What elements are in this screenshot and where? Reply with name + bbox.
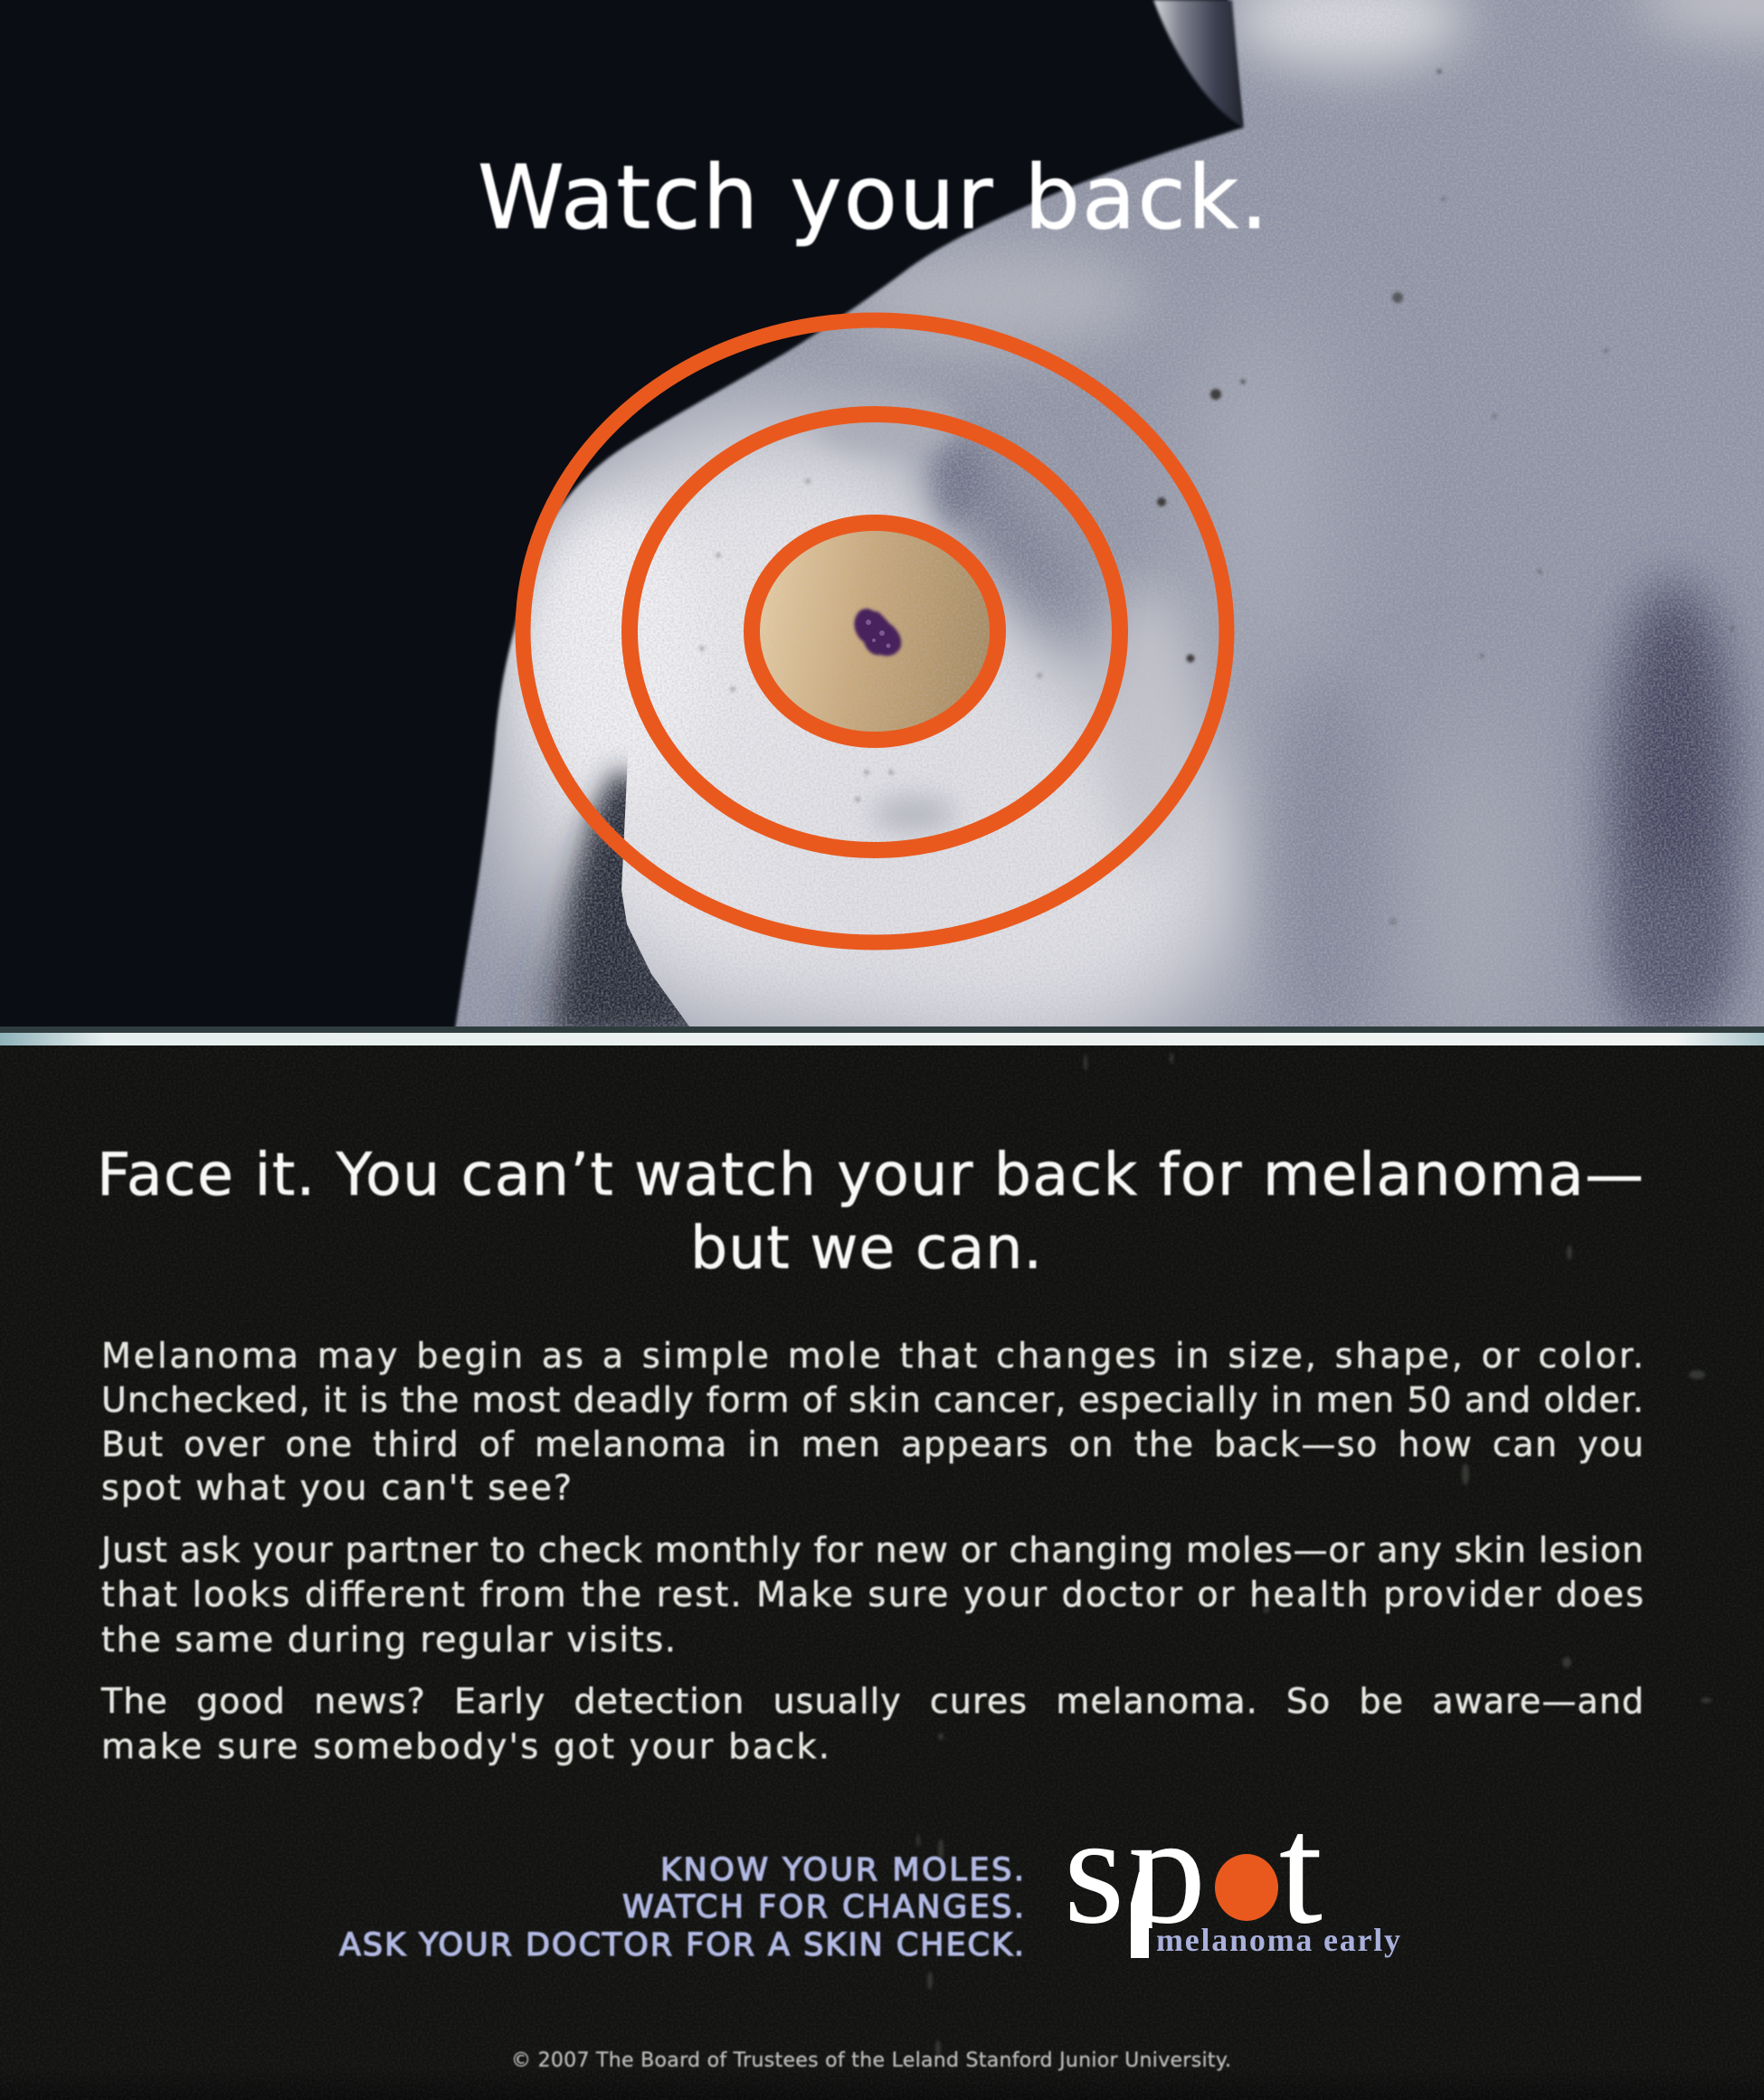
text block: paragraph one: Unchecked, it is the most deadly form of skin cancer, especially in men 50 and older.: [101, 1380, 1644, 1420]
logo wordmark: t: [1279, 1784, 1323, 1956]
text block: paragraph two: [100, 1530, 1644, 1660]
logo tagline: melanoma early: [1156, 1922, 1400, 1958]
heading: [97, 1141, 1644, 1282]
logo wordmark: p: [1128, 1784, 1206, 1956]
tagline: WATCH FOR CHANGES.: [622, 1889, 1024, 1925]
text block: paragraph two: Just ask your partner to check monthly for new or changing moles—or any skin lesion: [100, 1530, 1644, 1570]
tagline: [339, 1852, 1024, 1963]
heading: Face it. You can’t watch your back for melanoma—: [97, 1141, 1644, 1209]
icon: outer orange ring: [523, 320, 1227, 942]
title: Watch your back.: [478, 147, 1268, 249]
logo: p stem: [1131, 1872, 1149, 1958]
tagline: ASK YOUR DOCTOR FOR A SKIN CHECK.: [339, 1927, 1024, 1963]
panel: photo of bare back and shoulder: [453, 0, 1764, 1026]
icon: inner orange ring: [752, 523, 998, 740]
logo wordmark: o: [1217, 1784, 1295, 1956]
tagline: KNOW YOUR MOLES.: [660, 1852, 1024, 1888]
panel: black text panel: [0, 1045, 1764, 2100]
heading: but we can.: [690, 1215, 1042, 1282]
icon: melanoma mole: [854, 609, 901, 656]
logo: spot melanoma early: [1069, 1834, 1400, 1958]
text block: paragraph two: the same during regular visits.: [101, 1620, 676, 1660]
text block: paragraph three: make sure somebody's got your back.: [101, 1726, 830, 1766]
decoration: print scratches and specks: [916, 1053, 1712, 2057]
icon: middle orange ring: [630, 414, 1120, 850]
text block: paragraph one: But over one third of melanoma in men appears on the back—so how can you: [101, 1424, 1644, 1464]
text block: paragraph three: [100, 1681, 1644, 1766]
copyright note: © 2007 The Board of Trustees of the Leland Stanford Junior University.: [511, 2049, 1231, 2072]
text block: paragraph one: [101, 1336, 1644, 1508]
callout: concentric target around mole: [523, 320, 1227, 942]
illustration: armpit shadow: [534, 769, 715, 1036]
illustration: skin of back and shoulder: [434, 0, 1764, 1103]
text block: paragraph one: spot what you can't see?: [101, 1468, 572, 1508]
divider strip: [0, 1026, 1764, 1045]
text block: paragraph two: that looks different from the rest. Make sure your doctor or health provider does: [101, 1575, 1644, 1614]
icon: tan skin disc showing true colour: [760, 531, 990, 732]
text block: paragraph three: The good news? Early detection usually cures melanoma. So be aware—and: [100, 1681, 1644, 1721]
text block: paragraph one: Melanoma may begin as a simple mole that changes in size, shape, or color.: [101, 1336, 1644, 1376]
icon: scattered skin moles: [699, 69, 1735, 925]
icon: orange dot: [1215, 1854, 1278, 1921]
logo wordmark: s: [1064, 1784, 1124, 1956]
illustration: neck fold: [1153, 0, 1243, 128]
